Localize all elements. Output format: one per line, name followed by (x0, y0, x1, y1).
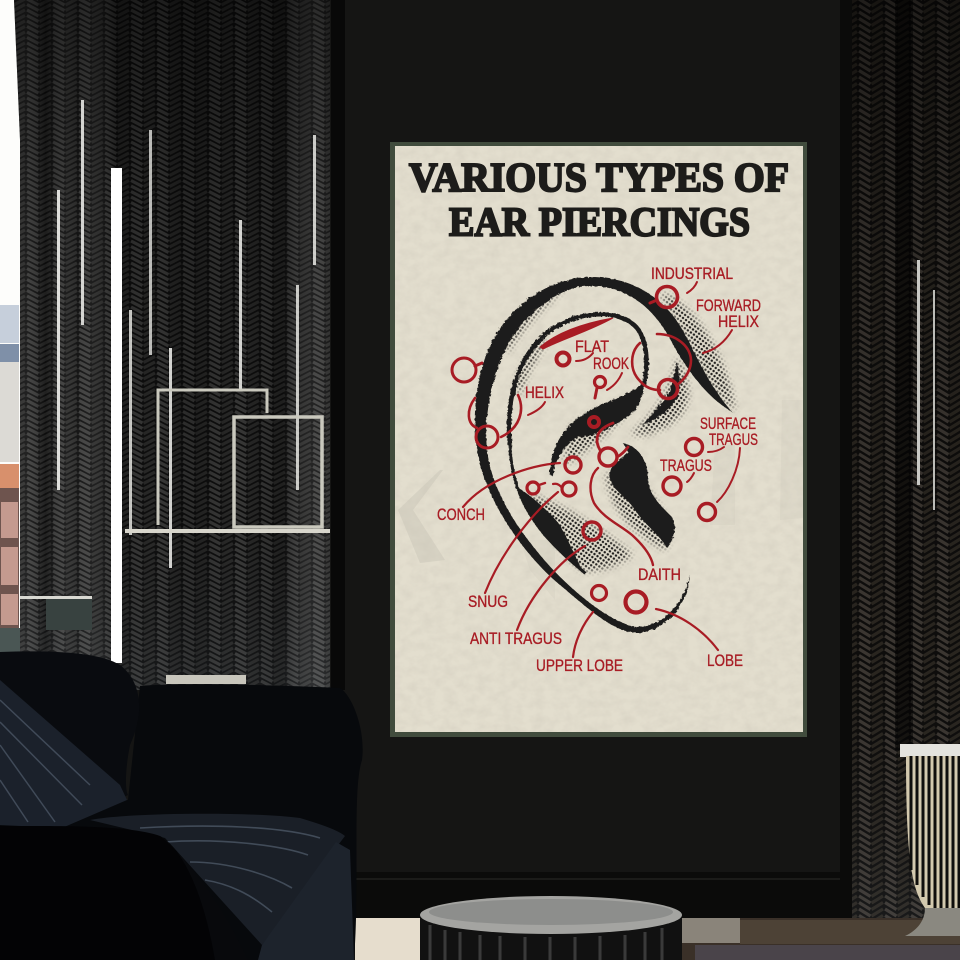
ring: upper lobe (573, 586, 606, 657)
round table (420, 896, 682, 960)
ear illustration (474, 276, 740, 634)
tragus shadow (610, 443, 674, 548)
antitragus fold (642, 362, 680, 425)
back cushion (0, 651, 139, 825)
labels: UPPER LOBE (536, 656, 623, 675)
reflected square frames and shelf (125, 390, 330, 531)
sofa (0, 651, 363, 960)
ring: daith (589, 417, 653, 565)
labels: ANTI TRAGUS (470, 629, 562, 648)
ring: snug (485, 482, 576, 593)
ring: flat (556, 352, 593, 366)
poster frame (390, 142, 807, 737)
sofa seat (90, 814, 345, 945)
striped vase (900, 744, 960, 936)
ring: forward helix with arcs (632, 330, 732, 398)
labels: FORWARD (696, 296, 761, 315)
faint watermark shapes (398, 400, 803, 600)
labels: CONCH (437, 505, 485, 524)
ring: surface tragus (686, 438, 740, 520)
ring: rook (594, 373, 622, 398)
floor and rug (355, 918, 960, 960)
ring: tragus (663, 473, 694, 495)
labels: SURFACE (700, 414, 756, 433)
labels: HELIX (718, 312, 759, 331)
labels: TRAGUS (660, 456, 712, 475)
flat cartilage red strip (540, 318, 613, 349)
window with city view (0, 0, 90, 680)
labels: LOBE (707, 651, 743, 670)
striped pillow (0, 680, 127, 828)
baseboard (345, 872, 840, 918)
labels (437, 264, 761, 675)
labels: SNUG (468, 592, 508, 611)
labels: DAITH (638, 565, 681, 584)
window light lines on curtain (57, 100, 316, 684)
title: EAR PIERCINGS (449, 198, 750, 244)
ring: helix with arcs (469, 395, 545, 448)
title (409, 154, 789, 244)
antihelix line (510, 440, 585, 573)
sofa back (0, 684, 363, 960)
labels: INDUSTRIAL (651, 264, 733, 283)
ring: industrial (650, 282, 697, 308)
antihelix shadow (517, 487, 582, 570)
ring: lobe (626, 592, 718, 650)
poster paper (395, 146, 803, 732)
central wall column edge (331, 0, 345, 690)
labels: TRAGUS (709, 430, 758, 449)
inner helix line (509, 314, 646, 445)
ring: outer helix (452, 358, 482, 382)
sofa front panel (258, 842, 354, 960)
framed poster (390, 140, 810, 740)
red piercings and leader lines (452, 282, 740, 657)
upper concha leaf (550, 383, 644, 476)
labels: ROOK (593, 354, 629, 373)
ring: anti tragus (517, 522, 601, 630)
right patterned curtain (840, 0, 960, 920)
ring: conch (463, 457, 581, 507)
title: VARIOUS TYPES OF (409, 154, 789, 200)
outer helix outline (475, 277, 732, 633)
stippled shading (505, 290, 740, 576)
left patterned curtain (14, 0, 330, 690)
labels: HELIX (525, 383, 564, 402)
labels: FLAT (575, 337, 609, 356)
front arm (0, 826, 215, 960)
